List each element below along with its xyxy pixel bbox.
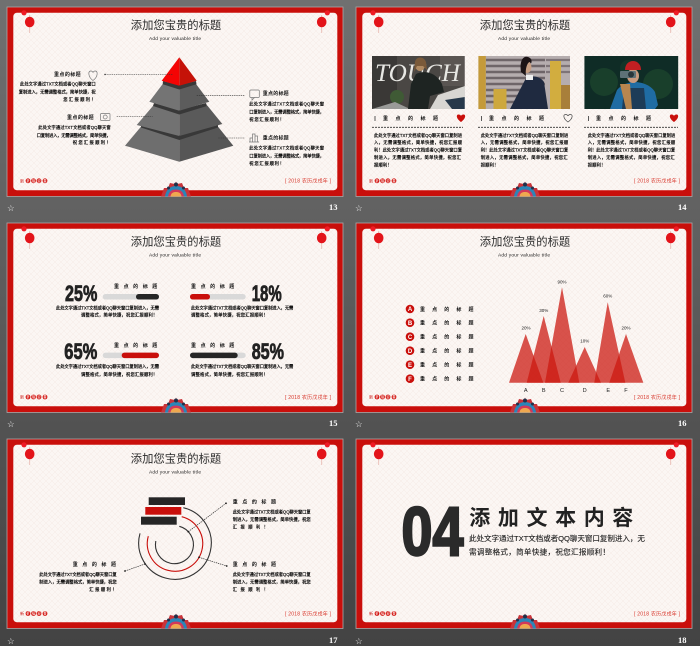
page number 18: 18: [678, 635, 686, 645]
footer 17: 祈: [26, 611, 30, 616]
photo 1: fashion street: TOUCH: [375, 60, 462, 87]
callout: top left: [19, 71, 173, 103]
callout: lower left: [37, 114, 153, 146]
photo 3: photographer in forest: [584, 56, 678, 109]
footer 17: [ 2018 农历戊戌年 ]: [285, 610, 332, 617]
footer 13: 祈: [26, 178, 30, 183]
page number 14: 14: [678, 202, 687, 212]
legend list: 重 点 的 标 题: [420, 306, 474, 313]
slide 16: triangle chart: [355, 223, 692, 430]
footer 15: [ 2018 农历戊戌年 ]: [285, 394, 332, 401]
callout: bottom left: 制进入，无需调整格式，简单快捷，祝您: [39, 578, 117, 585]
section heading: 添加文本内容: [469, 506, 633, 530]
footer 15: 祈: [26, 394, 30, 399]
column 2 text: 报顺利！: [481, 162, 498, 169]
callout: bottom left: [39, 561, 146, 593]
legend list: 重 点 的 标 题: [420, 334, 474, 340]
footer 16: 春: [392, 394, 396, 399]
slide 16 title: 添加您宝贵的标题: [480, 234, 570, 248]
footer 17: 春: [43, 611, 47, 616]
stat 25%: 调整格式，简单快捷，祝您汇报顺利！: [81, 312, 157, 319]
stat 85%: [190, 339, 294, 378]
callout: lower left: 口复制进入，无需调整格式，简单快捷，: [37, 132, 111, 139]
footer 13: 福: [32, 178, 35, 183]
slide 15: progress bars: [7, 223, 343, 430]
callout: top left: 重点的标题: [54, 71, 81, 78]
column 2 text: 利！此处文字通过TXT文档或者QQ聊天窗口复: [481, 147, 569, 154]
footer 16: 迎: [386, 394, 390, 399]
slide 16 subtitle: Add your valuable title: [498, 252, 550, 258]
photo 2: woman and yellow posts: [478, 56, 570, 109]
stat 25%: 25%: [65, 281, 97, 306]
callout: upper right: [197, 90, 324, 123]
callout: top left: 此处文字通过TXT文档或者QQ聊天窗口: [20, 80, 96, 88]
callout: top right: 制进入，无需调整格式，简单快捷，祝您: [233, 516, 311, 523]
column 1 text: 制进入，无需调整格式，简单快捷，祝您汇: [374, 154, 462, 161]
callout: top right: 重 点 的 标 题: [233, 498, 276, 506]
page number 16: 16: [678, 418, 686, 428]
stat 18%: 调整格式，简单快捷，祝您汇报顺利！: [191, 312, 268, 319]
footer 18: [369, 610, 681, 617]
stat 18%: 此处文字通过TXT文档或者QQ聊天窗口复制进入，无需: [191, 304, 294, 311]
column 1 text: 利！此处文字通过TXT文档或者QQ聊天窗口复: [374, 147, 463, 154]
stat 85%: 85%: [252, 339, 284, 364]
overlapping triangle chart: 60%: [603, 294, 612, 298]
callout: upper right: 重点的标题: [263, 90, 289, 97]
footer 18: 新: [369, 610, 373, 616]
callout: top right: 汇报顺利！: [233, 523, 268, 530]
callout: top right: 此处文字通过TXT文档或者QQ聊天窗口复: [233, 508, 311, 515]
footer 14: [ 2018 农历戊戌年 ]: [634, 178, 681, 185]
stat 25%: 此处文字通过TXT文档或者QQ聊天窗口复制进入，无需: [56, 304, 160, 311]
column 1 text: [372, 114, 465, 169]
footer 16: 福: [381, 394, 384, 399]
column 2 text: 入，无需调整格式，简单快捷，祝您汇报顺: [481, 139, 569, 146]
column 1 text: 此处文字通过TXT文档或者QQ聊天窗口复制进: [374, 132, 463, 139]
callout: top left: 您汇报顺利！: [63, 96, 96, 103]
footer 15: 春: [43, 394, 47, 399]
column 1 text: 报顺利！: [374, 162, 392, 169]
callout: lower left: 重点的标题: [67, 114, 94, 121]
footer 17: 福: [32, 611, 35, 616]
column 3 text: 重 点 的 标 题: [596, 115, 651, 122]
column 2 text: [478, 114, 572, 169]
callout: lower right: [218, 134, 324, 167]
column 3 text: 此处文字通过TXT文档或者QQ聊天窗口复制进: [588, 132, 676, 139]
column 2 text: 此处文字通过TXT文档或者QQ聊天窗口复制进: [481, 132, 569, 139]
footer 13: 迎: [37, 178, 41, 183]
pyramid chart: [125, 57, 233, 162]
callout: bottom right: [198, 556, 311, 593]
stat 65%: 此处文字通过TXT文档或者QQ聊天窗口复制进入，无需: [56, 363, 160, 370]
footer 18: 春: [392, 611, 396, 616]
overlapping triangle chart: 30%: [539, 308, 548, 313]
callout: lower right: 口复制进入，无需调整格式，简单快捷，: [249, 152, 324, 159]
overlapping triangle chart: 20%: [621, 326, 631, 330]
slide 14: photos: [355, 7, 692, 214]
callout: bottom right: 制进入，无需调整格式，简单快捷，祝您: [233, 578, 311, 585]
footer 18: 福: [381, 611, 384, 616]
stat 65%: 调整格式，简单快捷，祝您汇报顺利！: [81, 371, 157, 378]
legend list: C: [408, 335, 413, 341]
footer 16: [ 2018 农历戊戌年 ]: [634, 394, 681, 401]
callout: bottom right: 汇报顺利！: [233, 586, 268, 593]
footer 13: [20, 178, 332, 185]
footer 15: [20, 394, 332, 401]
overlapping triangle chart: E: [606, 388, 610, 394]
page number 13: 13: [329, 202, 338, 212]
slide 17: concentric arcs: [7, 439, 343, 646]
legend list: 重 点 的 标 题: [420, 348, 474, 354]
page number 13: ☆: [7, 204, 15, 214]
stat 18%: 重 点 的 标 题: [191, 283, 234, 290]
stat 25%: 重 点 的 标 题: [114, 283, 157, 290]
legend list: 重 点 的 标 题: [420, 320, 474, 326]
page number 15: 15: [329, 418, 338, 428]
footer 15: 福: [32, 394, 35, 399]
stat 65%: 65%: [64, 339, 97, 364]
footer 13: 春: [43, 178, 47, 183]
callout: bottom left: 此处文字通过TXT文档或者QQ聊天窗口复: [39, 571, 117, 578]
overlapping triangle chart: [509, 280, 643, 394]
slide 13 subtitle: Add your valuable title: [149, 36, 201, 42]
column 3 text: [584, 114, 678, 169]
slide 14 subtitle: Add your valuable title: [498, 36, 550, 42]
footer 13: [ 2018 农历戊戌年 ]: [285, 178, 332, 185]
footer 14: 春: [392, 178, 396, 183]
stat 85%: 此处文字通过TXT文档或者QQ聊天窗口复制进入，无需: [191, 363, 294, 370]
column 3 text: 制进入，无需调整格式，简单快捷，祝您汇: [588, 154, 675, 161]
callout: lower left: 此处文字通过TXT文档或者QQ聊天窗: [38, 124, 111, 131]
column 1 text: 入，无需调整格式，简单快捷，祝您汇报顺: [374, 139, 463, 146]
legend list: B: [408, 321, 413, 327]
callout: lower left: 祝您汇报顺利！: [73, 139, 111, 146]
column 3 text: 利！此处文字通过TXT文档或者QQ聊天窗口复: [588, 147, 676, 154]
slide 13 title: 添加您宝贵的标题: [131, 18, 221, 32]
photo 1: fashion street: [372, 56, 465, 109]
overlapping triangle chart: D: [583, 388, 587, 394]
footer 17: [20, 610, 332, 617]
slide 15 title: 添加您宝贵的标题: [131, 234, 221, 248]
page number 15: [7, 418, 338, 430]
overlapping triangle chart: C: [560, 388, 564, 394]
page number 14: [355, 202, 687, 214]
callout: lower right: 此处文字通过TXT文档或者QQ聊天窗: [249, 144, 324, 151]
stat 85%: 重 点 的 标 题: [191, 342, 234, 349]
footer 13: 新: [20, 178, 24, 184]
footer 18: 迎: [386, 611, 390, 616]
overlapping triangle chart: 10%: [580, 338, 589, 344]
legend list: F: [408, 377, 412, 383]
overlapping triangle chart: 20%: [521, 326, 531, 330]
footer 17: 迎: [37, 611, 41, 616]
legend list: E: [408, 363, 412, 369]
slide 14 title: 添加您宝贵的标题: [480, 18, 570, 32]
page number 17: 17: [329, 635, 338, 645]
footer 14: 新: [369, 178, 373, 184]
overlapping triangle chart: F: [624, 388, 628, 394]
page number 18: [355, 635, 686, 646]
footer 18: [ 2018 农历戊戌年 ]: [634, 610, 681, 617]
column 3 text: 入，无需调整格式，简单快捷，祝您汇报顺: [588, 139, 676, 146]
slide 17 title: 添加您宝贵的标题: [131, 451, 221, 465]
column 2 text: 制进入，无需调整格式，简单快捷，祝您汇: [481, 154, 568, 161]
callout: lower right: 祝您汇报顺利！: [249, 160, 284, 167]
callout: upper right: 此处文字通过TXT文档或者QQ聊天窗: [249, 100, 324, 107]
stat 25%: [56, 281, 160, 319]
footer 14: [369, 178, 681, 185]
stat 65%: 重 点 的 标 题: [114, 342, 157, 349]
slide 13: pyramid: [7, 7, 343, 214]
callout: upper right: 口复制进入，无需调整格式，简单快捷，: [249, 108, 324, 115]
callout: bottom right: 此处文字通过TXT文档或者QQ聊天窗口复: [233, 571, 311, 578]
callout: top left: 复制进入，无需调整格式，简单快捷，祝: [19, 88, 96, 96]
overlapping triangle chart: 90%: [557, 280, 567, 284]
section body text: 需调整格式，简单快捷，祝您汇报顺利！: [469, 546, 610, 556]
stat 18%: 18%: [252, 281, 282, 306]
footer 14: 迎: [386, 178, 390, 183]
footer 16: 祈: [375, 394, 379, 399]
column 3 text: 报顺利！: [588, 162, 605, 169]
legend list: 重 点 的 标 题: [420, 376, 474, 382]
legend list: [406, 305, 474, 383]
page number 15: ☆: [7, 420, 15, 430]
footer 15: 迎: [37, 394, 41, 399]
callout: bottom right: 重 点 的 标 题: [233, 561, 276, 568]
column 2 text: 重 点 的 标 题: [489, 115, 544, 122]
overlapping triangle chart: B: [542, 388, 546, 394]
page number 13: [7, 202, 338, 214]
page number 17: [7, 635, 338, 646]
footer 14: 福: [381, 178, 384, 183]
callout: upper right: 祝您汇报顺利！: [249, 116, 284, 123]
footer 18: 祈: [375, 611, 379, 616]
footer 14: 祈: [375, 178, 379, 183]
slide 18: section divider: [355, 439, 692, 646]
legend list: A: [408, 307, 413, 313]
callout: top right: [187, 498, 311, 533]
section body text: [469, 533, 645, 556]
legend list: D: [408, 349, 413, 355]
page number 16: [355, 418, 686, 430]
footer 16: 新: [369, 394, 373, 400]
stat 18%: [190, 281, 294, 319]
slide 15 subtitle: Add your valuable title: [149, 252, 201, 258]
legend list: 重 点 的 标 题: [420, 362, 474, 368]
concentric arc chart: [139, 497, 211, 579]
stat 65%: [56, 339, 160, 378]
footer 17: 新: [20, 610, 24, 616]
slide 17 subtitle: Add your valuable title: [149, 469, 201, 475]
callout: lower right: 重点的标题: [263, 134, 289, 142]
page number 16: ☆: [355, 420, 363, 430]
footer 16: [369, 394, 681, 401]
page number 14: ☆: [355, 204, 363, 214]
big number 04: 04: [402, 493, 464, 570]
callout: bottom left: 重 点 的 标 题: [73, 561, 116, 568]
section body text: 此处文字通过TXT文档或者QQ聊天窗口复制进入，无: [469, 533, 645, 543]
stat 85%: 调整格式，简单快捷，祝您汇报顺利！: [191, 371, 268, 378]
column 1 text: 重 点 的 标 题: [383, 115, 438, 122]
footer 15: 新: [20, 394, 24, 400]
overlapping triangle chart: A: [524, 388, 528, 394]
callout: bottom left: 汇报顺利！: [89, 586, 117, 593]
